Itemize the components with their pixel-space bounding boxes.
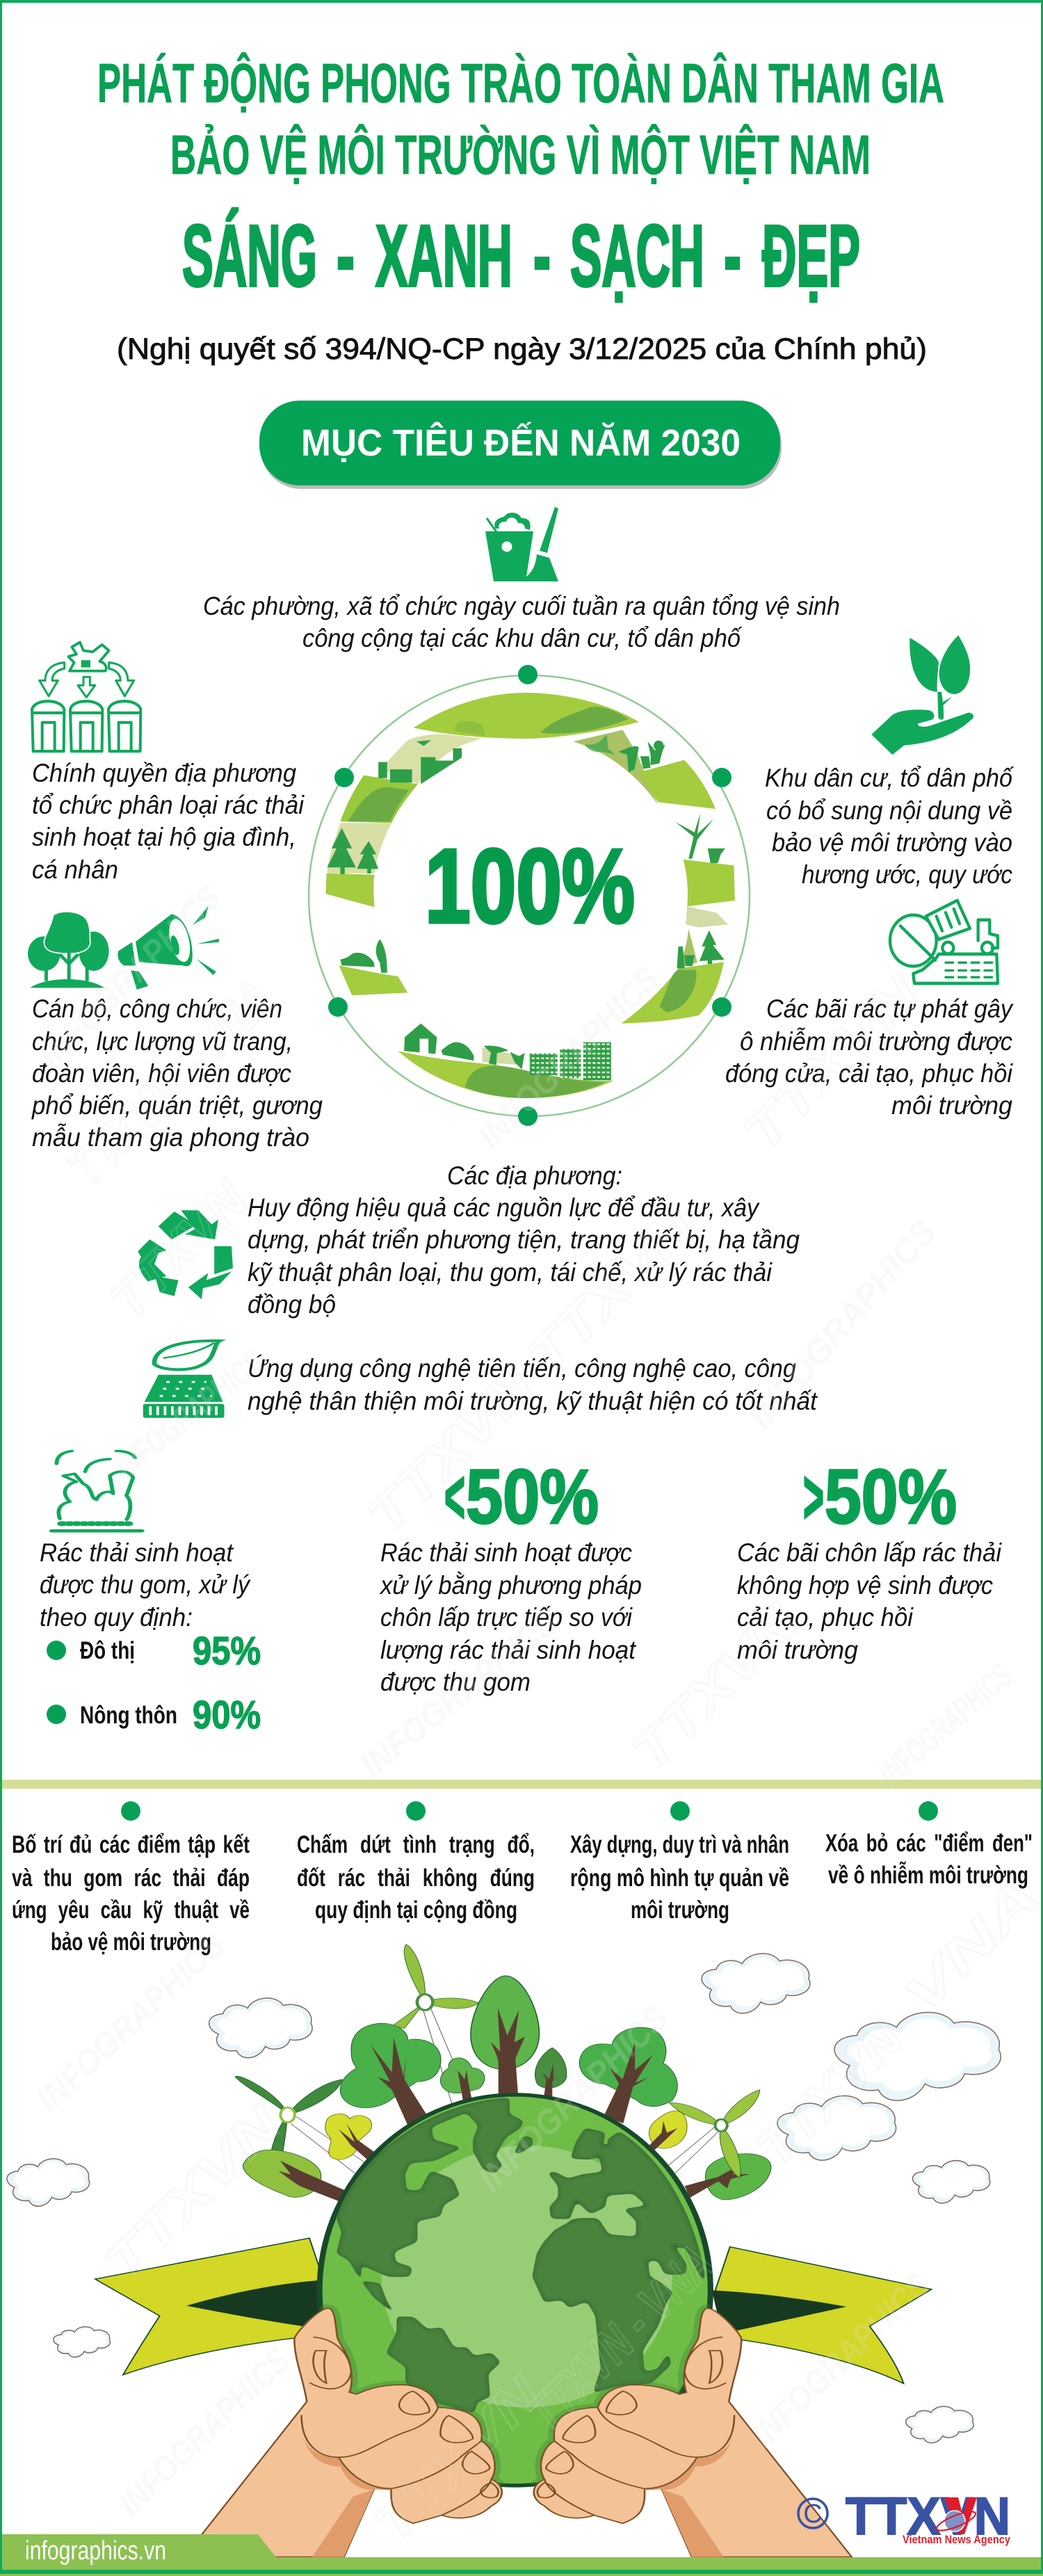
- column: self-managed models: rộng mô hình tự quản về: [570, 1865, 789, 1892]
- text: mobilise resources: Huy động hiệu quả các nguồn lực để đầu tư, xây: [248, 1193, 760, 1222]
- text: wards and communes: công cộng tại các khu dân cư, tổ dân phố: [302, 624, 743, 652]
- text: collected per regulation: Rác thải sinh hoạt: [40, 1538, 234, 1567]
- tree: lower right: [685, 2154, 771, 2200]
- column: collection points: Bố trí đủ các điểm tập kết: [12, 1831, 250, 1858]
- text: mobilise resources: [248, 1193, 800, 1319]
- watermark: agency marks: TTXVN: [732, 963, 931, 1162]
- text: residential areas: Khu dân cư, tổ dân phố: [765, 764, 1014, 792]
- panel: under 50 percent landfill: [379, 1454, 642, 1696]
- stat: urban 95%: [47, 1629, 261, 1673]
- text: unsanitary landfills: [737, 1538, 1003, 1664]
- text: local authorities sort waste: cá nhân: [32, 855, 118, 884]
- logo: TTXVN Vietnam News Agency: TTXVN: [846, 2487, 1010, 2546]
- illustration: globe, trees, turbines, hands: [184, 1945, 852, 2557]
- hand: left: [184, 2308, 502, 2557]
- watermark: agency marks: INFOGRAPHICS: [741, 1212, 944, 1437]
- icon: hand holding sprout: [871, 635, 973, 755]
- heading: sáng xanh sạch đẹp: SÁNG: [182, 208, 317, 305]
- column: collection points: và thu gom rác thải đáp: [12, 1865, 250, 1892]
- text: residential areas: [765, 764, 1014, 889]
- text: direct landfill: [379, 1538, 642, 1696]
- stat: rural 90%: [47, 1693, 261, 1737]
- watermark: agency marks: [29, 878, 1043, 2553]
- text: direct landfill: xử lý bằng phương pháp: [379, 1571, 642, 1600]
- tree: small dark: [535, 2047, 567, 2098]
- text: spontaneous dumps: [725, 995, 1014, 1120]
- stat: urban 95%: 95%: [193, 1629, 261, 1673]
- stat: >50%: 50%: [825, 1454, 957, 1540]
- text: officials and union members: đoàn viên, hội viên được: [32, 1059, 291, 1088]
- watermark: agency marks: VNA: [892, 1866, 1043, 2024]
- text: officials and union members: [31, 995, 323, 1152]
- watermark: agency marks: INFOGRAPHICS: [743, 2265, 937, 2454]
- text: mobilise resources: đồng bộ: [248, 1290, 336, 1319]
- icon: rubbish heap: [52, 1451, 142, 1531]
- text: wards and communes: Các phường, xã tổ chức ngày cuối tuần ra quân tổng vệ sinh: [203, 592, 840, 620]
- heading: sáng xanh sạch đẹp: SẠCH: [570, 208, 704, 305]
- text: local authorities sort waste: tổ chức phân loại rác thải: [32, 791, 305, 819]
- stat: urban 95%: Đô thị: [80, 1637, 135, 1664]
- watermark: agency marks: INFOGRAPHICS: [107, 1343, 270, 1486]
- stat: <50%: 50%: [466, 1454, 599, 1540]
- watermark: agency marks: TTXVN: [357, 1355, 546, 1545]
- text: residential areas: bảo vệ môi trường vào: [772, 828, 1012, 857]
- watermark: agency marks: TTXVN: [99, 1170, 259, 1329]
- stat: rural 90%: 90%: [193, 1693, 261, 1737]
- watermark: agency marks: TTXVN - VNA: [517, 2234, 725, 2442]
- stat: >50%: >: [803, 1454, 824, 1540]
- column: self-managed models: Xây dựng, duy trì và nhân: [570, 1831, 789, 1858]
- text: wards and communes: [203, 592, 840, 652]
- icon: waste sorting bins: [32, 642, 140, 751]
- text: spontaneous dumps: đóng cửa, cải tạo, phục hồi: [725, 1059, 1014, 1088]
- heading: sáng xanh sạch đẹp: -: [724, 208, 741, 305]
- text: mobilise resources: dựng, phát triển phương tiện, trang thiết bị, hạ tầng: [248, 1225, 800, 1254]
- text: localities: Các địa phương:: [447, 1161, 622, 1190]
- icon: eco technology: [143, 1341, 225, 1418]
- text: officials and union members: mẫu tham gia phong trào: [32, 1123, 309, 1152]
- tree: yellow right: [649, 2111, 687, 2150]
- divider band: [2, 1780, 1041, 1789]
- text: direct landfill: Rác thải sinh hoạt được: [380, 1538, 632, 1567]
- watermark: agency marks: TTXVN: [517, 1196, 706, 1385]
- text: mobilise resources: kỹ thuật phân loại, thu gom, tái chế, xử lý rác thải: [248, 1258, 773, 1287]
- panel: household waste collected: [40, 1451, 261, 1737]
- column: collection points: bảo vệ môi trường: [51, 1929, 211, 1956]
- icon: bucket and broom: [485, 507, 558, 581]
- logo: TTXVN Vietnam News Agency: C: [803, 2499, 823, 2529]
- heading: sáng xanh sạch đẹp: [182, 208, 860, 305]
- turbine lines: [291, 2009, 718, 2175]
- tree: yellow left: [325, 2114, 375, 2159]
- wind turbine: left: [235, 2076, 342, 2184]
- text: advanced technology: [248, 1354, 818, 1415]
- text: local authorities sort waste: Chính quyền địa phương: [32, 759, 296, 787]
- icon: trees and megaphone: [28, 905, 219, 990]
- tree: lower left: [243, 2150, 346, 2201]
- text: collected per regulation: [40, 1538, 251, 1632]
- subtitle: resolution: (Nghị quyết số 394/NQ-CP ngày 3/12/2025 của Chính phủ): [117, 332, 927, 366]
- connector dots: [328, 665, 731, 1126]
- tree: tall centre: [471, 1976, 539, 2097]
- footer band: [0, 2534, 1043, 2576]
- title: [97, 52, 944, 186]
- text: local authorities sort waste: sinh hoạt tại hộ gia đình,: [32, 823, 296, 851]
- watermark: agency marks: TTXVN: [746, 2009, 915, 2177]
- text: collected per regulation: được thu gom, xử lý: [40, 1570, 251, 1599]
- watermark: agency marks: TTXVN: [621, 1592, 810, 1781]
- column: self-managed models: [570, 1801, 789, 1924]
- watermark: agency marks: TTXVN: [364, 2364, 553, 2553]
- text: unsanitary landfills: không hợp vệ sinh được: [737, 1571, 993, 1600]
- icon: closed dump and truck: [890, 901, 998, 983]
- watermark: agency marks: INFOGRAPHICS: [111, 2340, 298, 2523]
- wind turbine: right: [670, 2090, 760, 2178]
- heading: sáng xanh sạch đẹp: XANH: [375, 208, 512, 305]
- column: stop dumping: quy định tại cộng đồng: [315, 1897, 517, 1924]
- text: direct landfill: được thu gom: [380, 1668, 531, 1696]
- heading: sáng xanh sạch đẹp: -: [533, 208, 551, 305]
- text: residential areas: có bổ sung nội dung về: [766, 796, 1012, 825]
- text: advanced technology: nghệ thân thiện môi trường, kỹ thuật hiện có tốt nhất: [248, 1387, 818, 1415]
- text: spontaneous dumps: ô nhiễm môi trường được: [740, 1027, 1012, 1056]
- column: stop dumping: đốt rác thải không đúng: [297, 1865, 535, 1892]
- text: collected per regulation: theo quy định:: [40, 1603, 193, 1632]
- icon: recycling arrows: [138, 1210, 233, 1299]
- text: spontaneous dumps: Các bãi rác tự phát gây: [766, 995, 1014, 1023]
- text: unsanitary landfills: môi trường: [737, 1636, 858, 1664]
- column: black spots: [825, 1801, 1033, 1889]
- text: advanced technology: Ứng dụng công nghệ tiên tiến, công nghệ cao, công: [248, 1354, 796, 1383]
- logo: TTXVN Vietnam News Agency: Vietnam News Agency: [903, 2533, 1010, 2546]
- globe: [317, 2093, 713, 2488]
- text: officials and union members: phổ biến, quán triệt, gương: [31, 1091, 323, 1120]
- tree: small centre: [440, 2058, 485, 2100]
- tree: large left: [340, 2023, 441, 2126]
- ring outline: [309, 675, 750, 1116]
- heading: sáng xanh sạch đẹp: -: [337, 208, 355, 305]
- hand: right: [534, 2308, 852, 2557]
- value: 100%: 100%: [425, 827, 635, 944]
- watermark: agency marks: INFOGRAPHICS: [471, 1998, 676, 2198]
- watermark: agency marks: INFOGRAPHICS: [31, 878, 229, 1075]
- watermark: agency marks: INFOGRAPHICS: [353, 1603, 565, 1785]
- watermark: agency marks: TTXVN: [94, 2093, 293, 2292]
- text: direct landfill: lượng rác thải sinh hoạt: [380, 1636, 637, 1664]
- column: stop dumping: Chấm dứt tình trạng đổ,: [297, 1831, 535, 1858]
- column: stop dumping: [297, 1801, 535, 1924]
- banner: goals to 2030: [259, 401, 782, 489]
- illustration: yellow ribbons: [95, 2238, 932, 2383]
- wind turbine: top: [392, 1945, 479, 2029]
- stat: <50%: <: [444, 1454, 465, 1540]
- chart: 100 percent ring: [309, 665, 750, 1126]
- panel: over 50 percent landfill renovated: [737, 1454, 1003, 1664]
- text: officials and union members: Cán bộ, công chức, viên: [32, 995, 282, 1023]
- watermark: agency marks: TTXVN - VNA: [58, 969, 285, 1197]
- illustration: clouds: [7, 1954, 1001, 2443]
- column: collection points: ứng yêu cầu kỹ thuật về: [12, 1897, 250, 1924]
- column: collection points: [12, 1801, 250, 1956]
- text: unsanitary landfills: Các bãi chôn lấp rác thải: [737, 1538, 1003, 1567]
- watermark: agency marks: INFOGRAPHICS: [29, 1926, 232, 2119]
- footer: website: infographics.vn: [25, 2536, 166, 2566]
- watermark: agency marks: INFOGRAPHICS: [470, 959, 668, 1157]
- banner: goals to 2030: MỤC TIÊU ĐẾN NĂM 2030: [301, 421, 741, 464]
- text: local authorities sort waste: [32, 759, 305, 884]
- text: residential areas: hương ước, quy ước: [802, 860, 1012, 889]
- text: direct landfill: chôn lấp trực tiếp so với: [380, 1603, 633, 1632]
- text: unsanitary landfills: cải tạo, phục hồi: [737, 1603, 914, 1632]
- ring illustration: [325, 693, 735, 1098]
- heading: sáng xanh sạch đẹp: ĐẸP: [762, 208, 860, 305]
- text: officials and union members: chức, lực lượng vũ trang,: [32, 1027, 293, 1056]
- text: spontaneous dumps: môi trường: [891, 1091, 1012, 1120]
- tree: large right: [579, 2027, 677, 2123]
- column: self-managed models: môi trường: [631, 1897, 729, 1924]
- stat: rural 90%: Nông thôn: [80, 1702, 177, 1729]
